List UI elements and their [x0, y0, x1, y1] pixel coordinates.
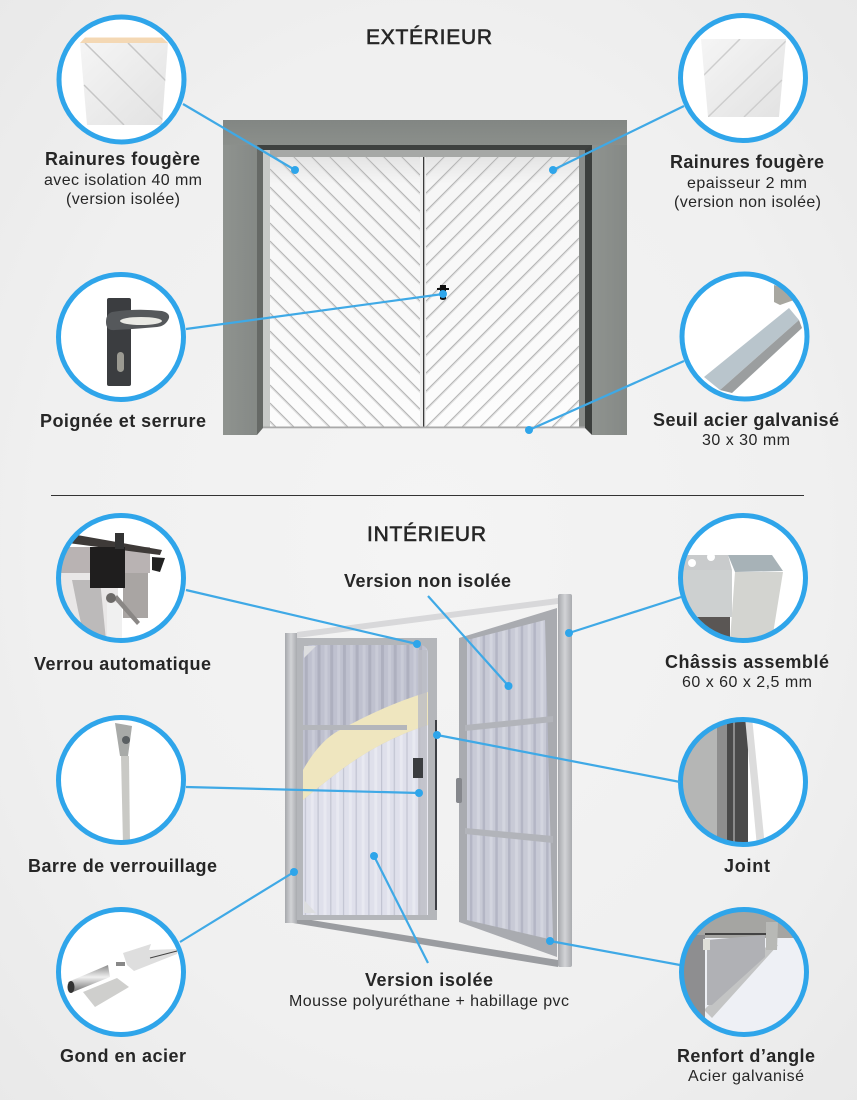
label: gond en acier: Gond en acier — [60, 1046, 186, 1066]
label: rainures fougère non isolée: Rainures fougère — [670, 152, 824, 172]
right post — [558, 594, 572, 967]
thumbnail: rainures fougère non isolée — [680, 16, 806, 140]
label: version isolée: Mousse polyuréthane + habillage pvc — [289, 993, 569, 1010]
thumbnail: rainures fougère isolée — [59, 17, 190, 142]
thumbnail: renfort d'angle — [680, 907, 810, 1037]
label: rainures fougère isolée: (version isolée) — [66, 191, 180, 208]
leader lines and dots — [180, 104, 684, 965]
label: rainures fougère isolée: avec isolation 40 mm — [44, 172, 202, 189]
label: rainures fougère non isolée: epaisseur 2 mm — [687, 175, 807, 192]
label: rainures fougère isolée — [44, 149, 202, 208]
label: châssis assemblé: 60 x 60 x 2,5 mm — [682, 674, 812, 691]
heading: intérieur: INTÉRIEUR — [367, 523, 486, 546]
label: seuil acier galvanisé: 30 x 30 mm — [702, 432, 790, 449]
label: seuil acier galvanisé — [653, 410, 839, 449]
label: seuil acier galvanisé: Seuil acier galvanisé — [653, 410, 839, 430]
thumbnail: châssis assemblé — [680, 516, 806, 641]
thumbnail: gond en acier — [58, 910, 184, 1034]
bottom rail — [293, 917, 558, 967]
interior door illustration — [285, 594, 572, 967]
thumbnail: barre de verrouillage — [58, 718, 184, 845]
label: joint: Joint — [724, 856, 770, 876]
label: renfort d'angle: Renfort d’angle — [677, 1046, 815, 1066]
exterior door illustration — [223, 120, 627, 435]
label: version non isolée: Version non isolée — [344, 571, 511, 591]
label: rainures fougère isolée: Rainures fougère — [45, 149, 200, 169]
left post — [285, 633, 297, 923]
label: rainures fougère non isolée — [670, 152, 824, 211]
thumbnail: verrou automatique — [58, 516, 184, 643]
thumbnail: joint — [680, 717, 806, 847]
right leaf — [456, 608, 557, 957]
label: renfort d'angle — [677, 1046, 815, 1085]
thumbnail: poignée et serrure — [58, 274, 184, 400]
label: châssis assemblé — [665, 652, 829, 691]
label: renfort d'angle: Acier galvanisé — [688, 1068, 804, 1085]
label: châssis assemblé: Châssis assemblé — [665, 652, 829, 672]
label: barre de verrouillage: Barre de verrouillage — [28, 856, 217, 876]
left leaf — [297, 638, 437, 920]
label: rainures fougère non isolée: (version non isolée) — [674, 194, 821, 211]
label: version isolée: Version isolée — [365, 970, 493, 990]
label: verrou automatique: Verrou automatique — [34, 654, 211, 674]
label: poignée et serrure: Poignée et serrure — [40, 411, 206, 431]
label: version isolée — [289, 970, 569, 1010]
door handle — [437, 285, 449, 300]
top rail — [297, 598, 558, 638]
thumbnail: seuil acier galvanisé — [682, 274, 807, 399]
heading: extérieur: EXTÉRIEUR — [366, 26, 492, 49]
